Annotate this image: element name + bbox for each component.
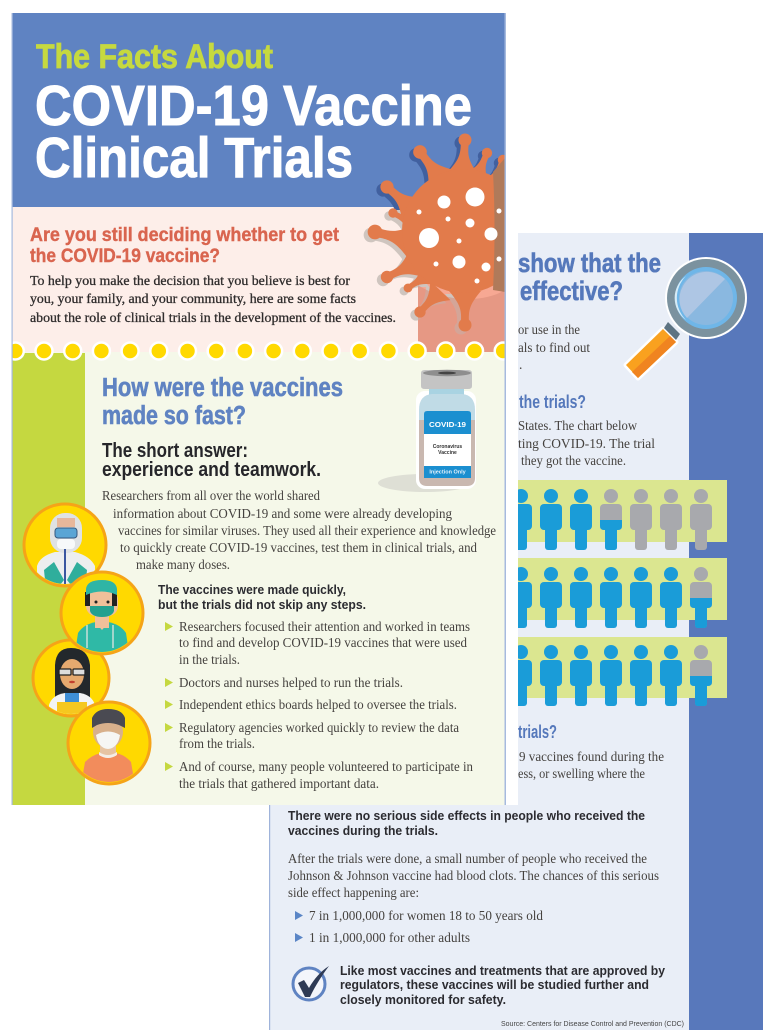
list: chances of side effect: 1 in 1,000,000 for other adults (309, 930, 470, 945)
text: chart introduction fragments (518, 418, 655, 468)
bullet: volunteers (165, 759, 473, 791)
avatar: woman with clipboard (33, 640, 109, 718)
heading: effectiveness question: effective? (520, 276, 623, 306)
bullet: researchers: in the trials. (179, 652, 240, 667)
heading: how so fast: How were the vaccines (102, 374, 343, 402)
avatar: researcher in protective suit (24, 504, 106, 590)
callout: continued monitoring: Like most vaccines and treatments that are approved by (340, 964, 665, 978)
text: researchers paragraph: information about COVID-19 and some were already developing (113, 506, 452, 521)
text: intro paragraph: about the role of clinical trials in the development of the vaccines. (30, 310, 396, 325)
bullet: regulatory agencies (165, 720, 459, 751)
title: Clinical Trials (35, 126, 353, 190)
text: blood clots paragraph: Johnson & Johnson vaccine had blood clots. The chances of this serious (288, 868, 659, 883)
heading: who was in the trials: the trials? (519, 392, 586, 412)
text: no serious side effects (288, 809, 645, 838)
text: side effects fragments (518, 749, 664, 781)
text: chart introduction fragments: ting COVID-19. The trial (518, 436, 655, 451)
back page left edge (269, 805, 270, 1030)
heading: how so fast (102, 374, 343, 430)
text: no serious side effects: There were no serious side effects in people who received the (288, 809, 645, 823)
back page background (269, 233, 689, 1030)
bullet: volunteers: the trials that gathered important data. (179, 776, 379, 791)
subheading: made quickly: The vaccines were made quickly, (158, 583, 346, 597)
heading: effectiveness question (518, 248, 661, 306)
subheading: made quickly (158, 583, 366, 612)
heading: how so fast: made so fast? (102, 402, 246, 430)
callout: continued monitoring: closely monitored for safety. (340, 993, 506, 1007)
icon: vaccine vial: Vaccine (438, 450, 457, 456)
callout: continued monitoring (340, 964, 665, 1007)
pink intro band (12, 207, 505, 352)
text: intro paragraph: To help you make the decision that you believe is best for (30, 273, 351, 288)
text: researchers paragraph (102, 488, 496, 572)
heading: side effects: trials? (518, 722, 557, 742)
icon: magnifying glass (626, 257, 747, 378)
callout: continued monitoring: regulators, these vaccines will be studied further and (340, 978, 649, 992)
text: blood clots paragraph: side effect happening are: (288, 885, 419, 900)
dotted divider (7, 342, 512, 360)
subheading: short answer (102, 440, 321, 481)
heading: still deciding: the COVID-19 vaccine? (30, 245, 220, 267)
white gap between pages (505, 233, 518, 805)
text: intro fragments: als to find out (518, 340, 590, 355)
icon: coronavirus (364, 134, 504, 352)
icon: vaccine vial: Injection Only (429, 470, 467, 476)
text: researchers paragraph: make many doses. (136, 557, 230, 572)
header band (12, 13, 505, 207)
cream content panel (12, 352, 505, 805)
icon: vaccine vial: COVID-19 (429, 420, 466, 429)
text: researchers paragraph: to quickly create COVID-19 vaccines, test them in clinical trials, and (120, 540, 477, 555)
bullet: ethics boards: Independent ethics boards helped to oversee the trials. (179, 697, 457, 712)
avatar: doctor in scrubs (61, 572, 143, 660)
text: researchers paragraph: vaccines for similar viruses. They used all their experience and knowledge (118, 523, 496, 538)
source note: Source: Centers for Disease Control and Prevention (CDC) (501, 1019, 684, 1028)
text: intro paragraph: you, your family, and your community, here are some facts (30, 291, 356, 306)
back page right band (689, 233, 763, 1030)
text: no serious side effects: vaccines during the trials. (288, 824, 438, 838)
heading: still deciding: Are you still deciding whether to get (30, 224, 339, 246)
bullet: regulatory agencies: Regulatory agencies worked quickly to review the data (179, 720, 459, 735)
icon: vaccine vial: Coronavirus (433, 444, 462, 450)
bullet: researchers (165, 619, 470, 667)
text: intro fragments: . (519, 357, 522, 372)
subheading: made quickly: but the trials did not skip any steps. (158, 598, 366, 612)
text: blood clots paragraph: After the trials were done, a small number of people who received the (288, 851, 647, 866)
icon: check mark (293, 966, 329, 1000)
back page (269, 233, 763, 1030)
title: COVID-19 Vaccine (35, 74, 472, 138)
text: intro fragments: or use in the (518, 322, 580, 337)
text: researchers paragraph: Researchers from all over the world shared (102, 488, 320, 503)
heading: effectiveness question: show that the (518, 248, 661, 278)
title: The Facts About (36, 38, 273, 76)
bullet: volunteers: And of course, many people volunteered to participate in (179, 759, 473, 774)
list: chances of side effect: 7 in 1,000,000 for women 18 to 50 years old (309, 908, 543, 923)
heading: still deciding (30, 224, 339, 267)
text: side effects fragments: ess, or swelling where the (518, 766, 645, 781)
list: chances of side effect (295, 908, 543, 945)
list: how trials were run (165, 619, 473, 791)
text: intro fragments (518, 322, 590, 372)
text: side effects fragments: 9 vaccines found during the (519, 749, 664, 764)
bullet: doctors and nurses: Doctors and nurses helped to run the trials. (179, 675, 403, 690)
chart row 2 (505, 558, 727, 628)
bullet: regulatory agencies: from the trials. (179, 736, 255, 751)
front page border (12, 13, 506, 805)
green side strip (12, 353, 85, 805)
text: chart introduction fragments: States. The chart below (518, 418, 637, 433)
text: intro paragraph (30, 273, 396, 325)
bullet: researchers: Researchers focused their attention and worked in teams (179, 619, 470, 634)
text: blood clots paragraph (288, 851, 659, 900)
chart row 3 (505, 637, 727, 706)
text: chart introduction fragments: they got the vaccine. (521, 453, 626, 468)
pink block behind virus (418, 280, 505, 352)
title (35, 38, 472, 190)
chart row 1 (505, 480, 727, 550)
icon: vaccine vial (378, 370, 476, 492)
front page (7, 13, 526, 805)
subheading: short answer: The short answer: (102, 440, 248, 462)
avatar: volunteer with mask (68, 702, 150, 785)
bullet: researchers: to find and develop COVID-19 vaccines that were used (179, 635, 467, 650)
subheading: short answer: experience and teamwork. (102, 459, 321, 481)
